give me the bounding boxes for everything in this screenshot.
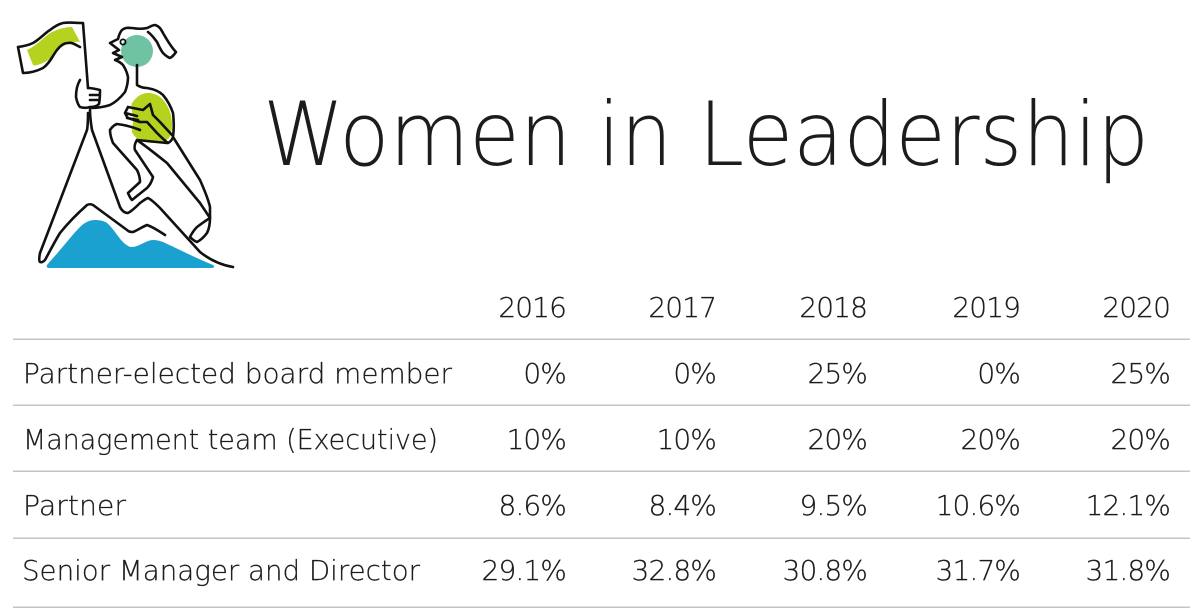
row: partner-elected board member: Partner-elected board member — [23, 357, 452, 390]
row: partner-elected board member: 0% — [673, 357, 716, 390]
row: partner-elected board member: 25% — [1110, 357, 1170, 390]
header row: years: 2018 — [799, 291, 867, 324]
icon: neck, torso and back — [137, 65, 210, 218]
row: partner-elected board member — [23, 357, 1170, 390]
row: senior manager and director: Senior Manager and Director — [22, 554, 420, 587]
row: management team: 20% — [1110, 423, 1170, 456]
icon: head colour patch — [121, 35, 153, 67]
icon: hand on chest — [125, 104, 172, 135]
illustration: woman climbing a mountain with a flag — [18, 23, 233, 268]
title: Women in Leadership — [263, 83, 1149, 186]
icon: flag colour patch — [27, 27, 80, 65]
table: women in leadership percentages — [13, 291, 1190, 608]
row: partner-elected board member: 25% — [807, 357, 867, 390]
row: senior manager and director: 32.8% — [632, 554, 716, 587]
header row: years — [498, 291, 1170, 324]
row: partner: 10.6% — [936, 489, 1020, 522]
header row: years: 2017 — [648, 291, 716, 324]
row: partner: 8.4% — [648, 489, 716, 522]
row: management team: 20% — [960, 423, 1020, 456]
icon: raised knee and foot — [137, 140, 210, 242]
row: management team: 10% — [506, 423, 566, 456]
row: senior manager and director: 29.1% — [482, 554, 566, 587]
row: partner: 12.1% — [1086, 489, 1170, 522]
row: management team: Management team (Executive) — [23, 423, 438, 456]
icon: flag and pole outline — [18, 23, 88, 88]
header row: years: 2020 — [1102, 291, 1170, 324]
row: senior manager and director — [22, 554, 1170, 587]
icon: head and ponytail — [90, 25, 176, 108]
row: partner — [23, 489, 1170, 522]
row: management team: 10% — [656, 423, 716, 456]
row: partner: Partner — [23, 489, 126, 522]
row: management team: 20% — [807, 423, 867, 456]
row: senior manager and director: 31.7% — [936, 554, 1020, 587]
icon: raised hand gripping pole — [76, 80, 100, 108]
header row: years: 2019 — [952, 291, 1020, 324]
icon: bent front leg — [110, 124, 167, 200]
row: management team — [23, 423, 1170, 456]
table rules — [13, 338, 1190, 608]
icon: torso colour patch — [131, 93, 172, 143]
icon: mountain outline line — [39, 113, 165, 262]
row: partner: 9.5% — [799, 489, 867, 522]
icon: eye — [120, 39, 126, 45]
row: partner-elected board member: 0% — [523, 357, 566, 390]
row: senior manager and director: 30.8% — [783, 554, 867, 587]
row: partner: 8.6% — [498, 489, 566, 522]
header row: years: 2016 — [498, 291, 566, 324]
row: senior manager and director: 31.8% — [1086, 554, 1170, 587]
icon: back leg line — [90, 110, 233, 267]
row: partner-elected board member: 0% — [977, 357, 1020, 390]
icon: mountain — [47, 220, 214, 268]
